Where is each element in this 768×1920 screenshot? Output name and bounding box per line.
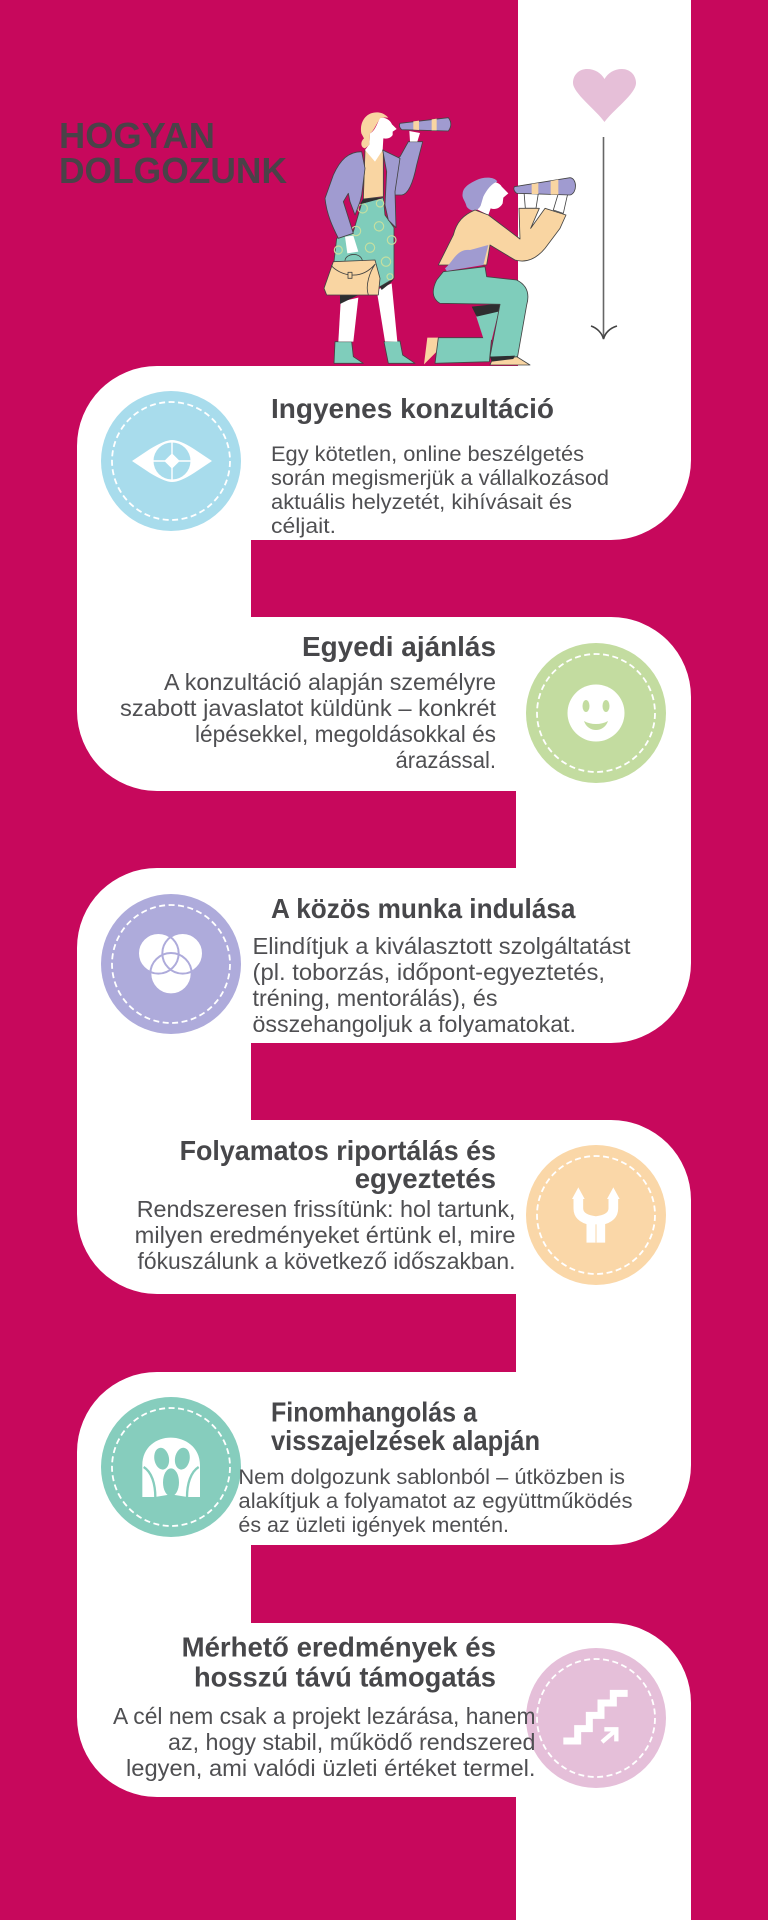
heading: visszajelzések alapján	[271, 1425, 540, 1456]
raised hand	[409, 131, 420, 142]
text block	[113, 1703, 536, 1781]
calf	[476, 308, 499, 340]
text block: A cél nem csak a projekt lezárása, hanem	[113, 1703, 536, 1729]
shin	[435, 338, 492, 363]
panel: step 4	[135, 1135, 666, 1285]
heading: egyeztetés	[355, 1163, 496, 1194]
jacket	[438, 208, 566, 265]
text block: alakítjuk a folyamatot az együttműködés	[238, 1489, 633, 1513]
jacket right	[383, 150, 400, 228]
text block: összehangoljuk a folyamatokat.	[252, 1011, 576, 1037]
icon: smiley	[526, 643, 666, 783]
text block: során megismerjük a vállalkozásod	[271, 466, 609, 490]
text block: milyen eredményeket értünk el, mire	[135, 1222, 515, 1248]
hair tail	[445, 245, 488, 271]
icon: heart	[573, 69, 636, 122]
icon: eye	[101, 391, 241, 531]
text block: és az üzleti igények mentén.	[238, 1513, 509, 1537]
shadows	[340, 198, 394, 304]
heading: A közös munka indulása	[271, 893, 576, 924]
heading: hosszú távú támogatás	[194, 1662, 496, 1693]
skirt rings	[334, 200, 396, 280]
telescope	[514, 178, 575, 195]
boots	[334, 341, 415, 363]
text block	[252, 933, 631, 1037]
back foot	[424, 338, 438, 364]
text block: legyen, ami valódi üzleti értéket termel.	[126, 1755, 536, 1781]
illustration: standing woman with telescope	[324, 112, 451, 363]
text block	[135, 1196, 515, 1274]
text block: céljait.	[271, 514, 336, 538]
title: DOLGOZUNK	[59, 150, 287, 191]
icon: overlapping circles	[101, 894, 241, 1034]
panel: step 3	[101, 893, 631, 1037]
text block	[271, 442, 609, 538]
icon: stairs with arrow	[526, 1648, 666, 1788]
heading: Ingyenes konzultáció	[271, 393, 554, 424]
title	[59, 115, 287, 191]
text block	[238, 1465, 633, 1537]
title: HOGYAN	[59, 115, 215, 156]
neck and face	[365, 118, 397, 162]
winding white path	[77, 0, 691, 1920]
arrow: downward	[591, 137, 617, 339]
heading: Egyedi ajánlás	[302, 631, 496, 662]
hair	[361, 112, 388, 148]
heading: Mérhető eredmények és	[182, 1632, 496, 1663]
text block	[120, 669, 496, 773]
skirt	[334, 198, 394, 295]
holding hand	[345, 236, 358, 253]
knee shadow	[472, 303, 502, 317]
text block: Elindítjuk a kiválasztott szolgáltatást	[252, 933, 631, 959]
icon: forked arrows	[526, 1145, 666, 1285]
icon: screaming face	[101, 1397, 241, 1537]
text block: árazással.	[396, 747, 496, 773]
text block: A konzultáció alapján személyre	[164, 669, 496, 695]
heading	[271, 1397, 540, 1456]
text block: tréning, mentorálás), és	[252, 985, 498, 1011]
handbag	[324, 260, 380, 295]
panel: step 6	[113, 1632, 666, 1788]
trousers	[433, 267, 528, 362]
text block: fókuszálunk a következő időszakban.	[138, 1248, 516, 1274]
heading	[180, 1135, 496, 1194]
text block: (pl. toborzás, időpont-egyeztetés,	[252, 959, 605, 985]
illustration: kneeling woman with telescope	[424, 178, 575, 365]
text block: szabott javaslatot küldünk – konkrét	[120, 695, 496, 721]
panel: step 2	[120, 631, 666, 783]
panel: step 5	[101, 1397, 633, 1537]
heading	[182, 1632, 496, 1693]
legs	[338, 283, 397, 342]
text block: Nem dolgozunk sablonból – útközben is	[238, 1465, 625, 1489]
heading: Folyamatos riportálás és	[180, 1135, 496, 1166]
heading: Finomhangolás a	[271, 1397, 477, 1428]
panel: step 1	[101, 391, 609, 538]
jacket sleeve	[388, 142, 423, 195]
text block: Rendszeresen frissítünk: hol tartunk,	[137, 1196, 515, 1222]
text block: aktuális helyzetét, kihívásait és	[271, 490, 572, 514]
text block: az, hogy stabil, működő rendszered	[168, 1729, 536, 1755]
hands	[524, 192, 568, 213]
hair	[462, 178, 497, 211]
text block: lépésekkel, megoldásokkal és	[195, 721, 496, 747]
front shoe	[490, 357, 530, 365]
text block: Egy kötetlen, online beszélgetés	[271, 442, 584, 466]
blouse	[363, 150, 383, 199]
telescope	[399, 118, 451, 131]
neck and face	[475, 182, 508, 215]
jacket left	[325, 152, 365, 238]
